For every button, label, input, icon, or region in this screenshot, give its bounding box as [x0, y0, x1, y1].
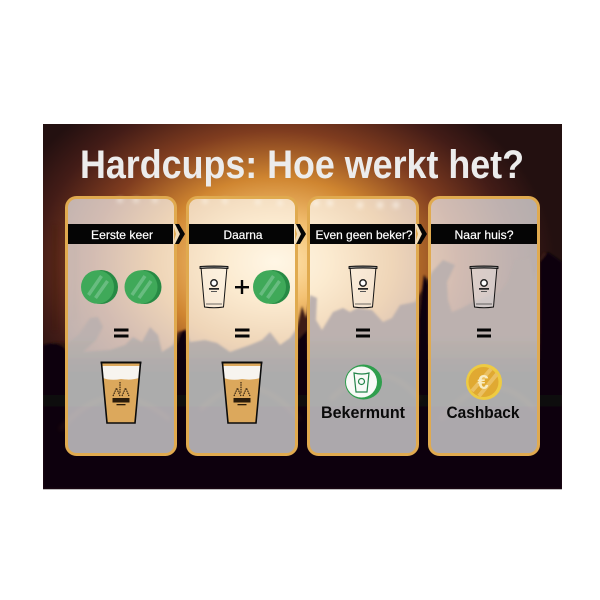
- background photo: concert crowd: [43, 124, 562, 489]
- icon: beer cup: [222, 362, 262, 423]
- plus sign: [235, 280, 249, 294]
- heading bar: [189, 224, 306, 244]
- heading bar: [68, 224, 185, 244]
- label: Cashback: [446, 403, 520, 422]
- icon: empty cup: [470, 266, 498, 308]
- panel card: [430, 198, 538, 454]
- panel: daarna: [188, 198, 306, 454]
- heading bar: Eerste keer: [91, 228, 153, 242]
- panel: even geen beker: [308, 198, 427, 454]
- icon: euro coin: €: [477, 372, 489, 394]
- panel: naar huis: [430, 198, 538, 454]
- bottom edge line: [43, 489, 562, 490]
- crowd silhouette: [43, 252, 562, 489]
- panel card: [66, 198, 176, 454]
- equals sign: [114, 328, 128, 338]
- equals sign: [477, 328, 491, 338]
- equals sign: [356, 328, 370, 338]
- icon: empty cup: [349, 266, 377, 308]
- panel: eerste keer: [66, 198, 185, 454]
- label: Bekermunt: [321, 403, 405, 422]
- icon: two green coins: [81, 270, 162, 304]
- icon: beer cup: [100, 362, 142, 423]
- heading bar: Naar huis?: [454, 228, 514, 242]
- icon: cup token: [345, 364, 382, 400]
- icon: euro coin: [466, 364, 502, 400]
- heading bar: Daarna: [224, 228, 263, 242]
- equals sign: [235, 328, 250, 338]
- icon: green coin: [253, 270, 290, 304]
- icon: empty cup: [200, 266, 228, 308]
- panel card: [308, 198, 418, 454]
- panel card: [188, 198, 296, 454]
- title: Hardcups: Hoe werkt het?: [80, 143, 524, 187]
- heading bar: [310, 224, 427, 244]
- heading bar: [431, 224, 537, 244]
- heading bar: Even geen beker?: [316, 228, 413, 242]
